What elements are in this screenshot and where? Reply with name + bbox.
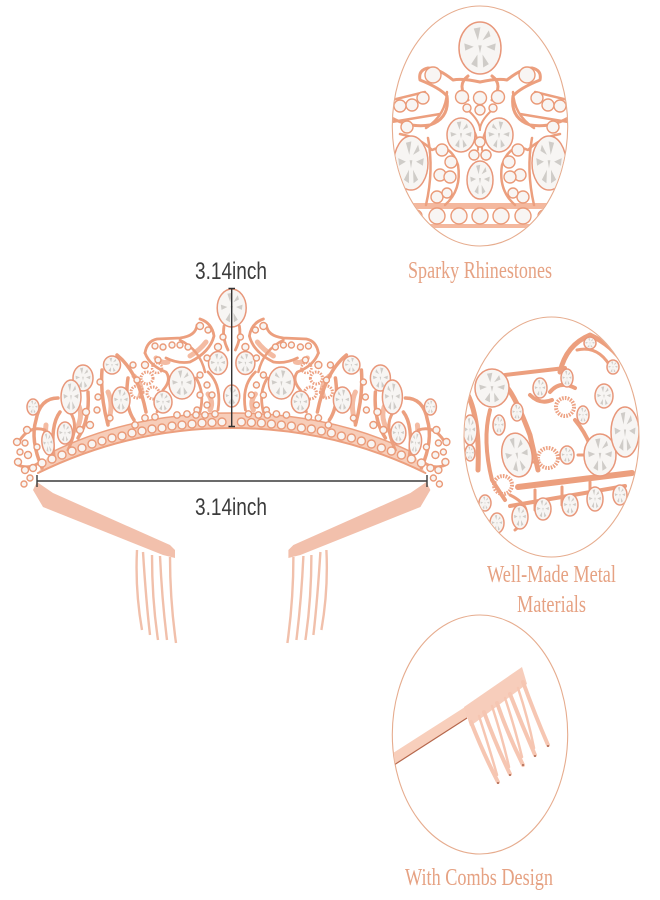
comb plate and teeth — [464, 667, 549, 784]
tiara crown left half — [14, 319, 232, 487]
left headband and comb — [33, 482, 176, 643]
headband strip — [394, 708, 468, 764]
caption: Sparky Rhinestones: Sparky Rhinestones — [408, 258, 552, 284]
caption: With Combs Design: With Combs Design — [405, 865, 553, 891]
caption: Well-Made Metal Materials — [487, 562, 616, 618]
tiara with headband and combs — [14, 289, 450, 643]
detail circle: comb — [390, 615, 568, 854]
detail circle: rhinestones — [392, 6, 568, 246]
tiara centre stone — [224, 385, 240, 407]
width label: 3.14inch — [195, 494, 267, 521]
height label: 3.14inch — [195, 258, 267, 285]
detail circle: metal materials — [463, 317, 639, 557]
caption: Well-Made Metal Materials: Materials — [517, 592, 586, 618]
tiara crown right half — [231, 319, 450, 487]
width measurement line — [37, 475, 427, 487]
height measurement line — [228, 288, 235, 426]
caption: Well-Made Metal Materials: Well-Made Metal — [487, 562, 616, 588]
tiara top centre stone — [217, 289, 246, 327]
right headband and comb — [287, 482, 430, 643]
